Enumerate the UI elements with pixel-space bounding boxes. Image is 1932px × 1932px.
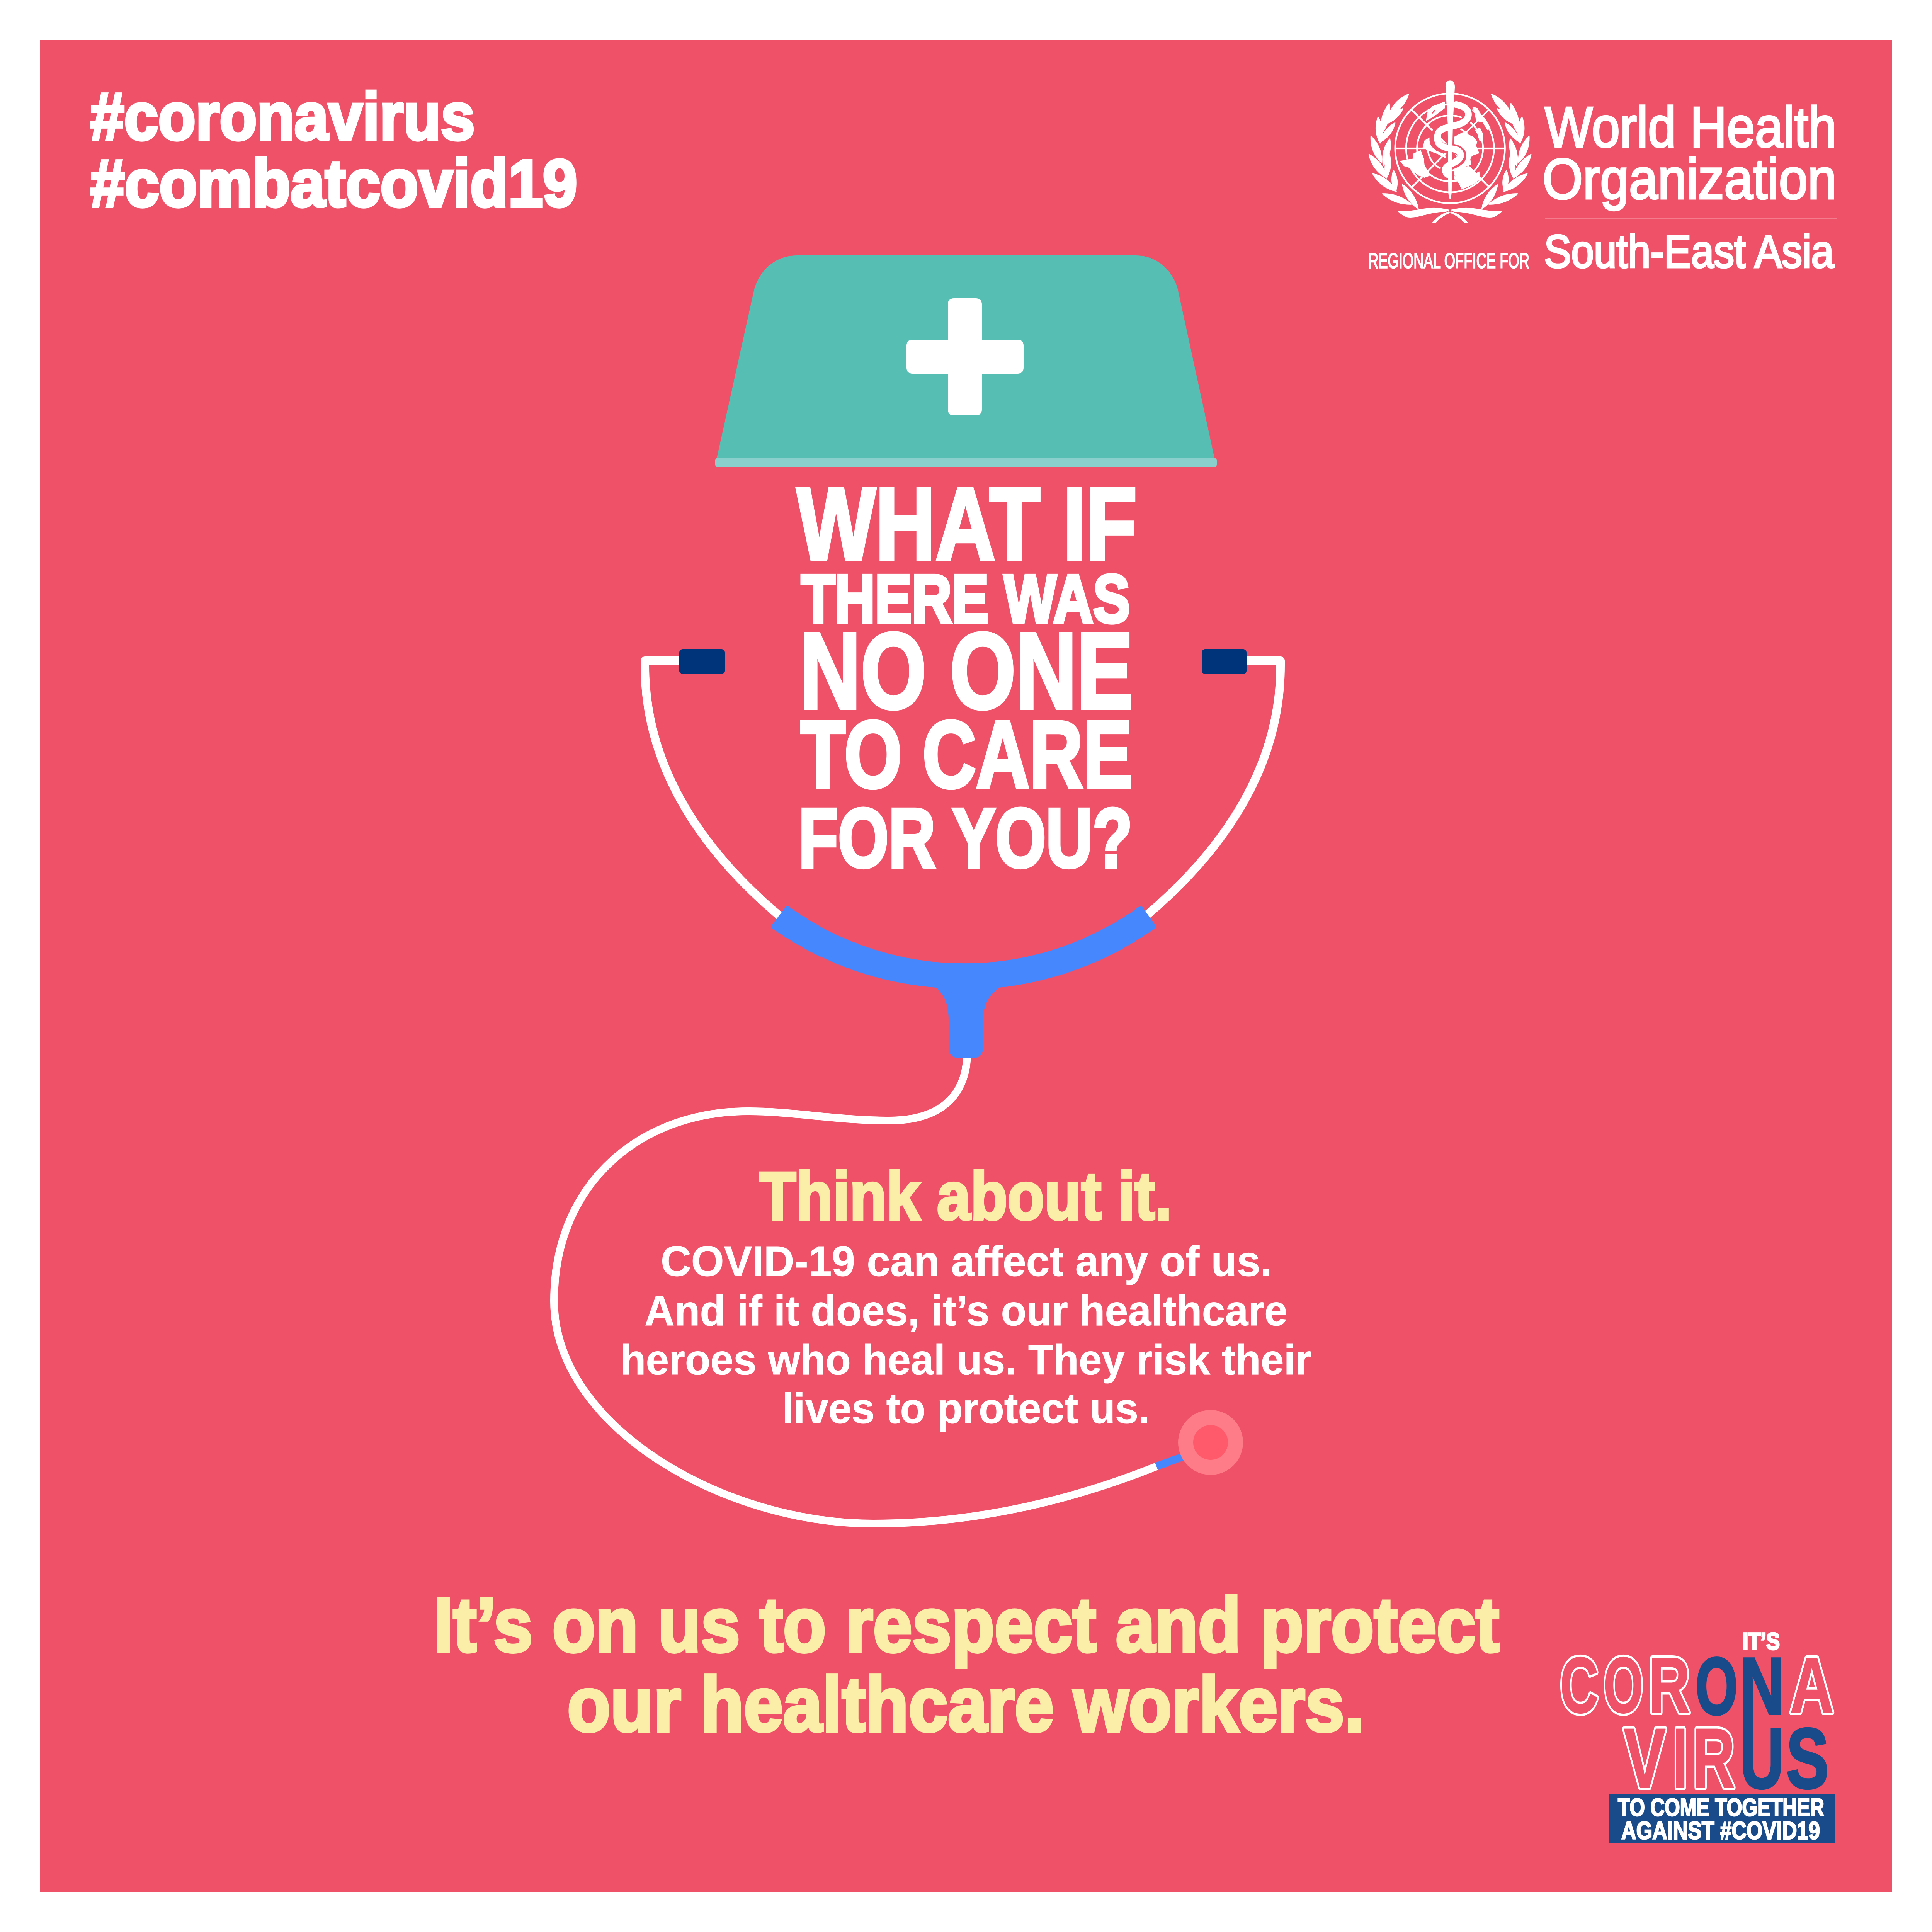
body text: COVID-19 can affect any of us. bbox=[661, 1238, 1272, 1285]
icon: stethoscope bbox=[554, 649, 1281, 1524]
slogan box bbox=[1609, 1794, 1835, 1845]
outlined letters: outer white layer: R bbox=[1648, 1641, 1690, 1730]
body text bbox=[621, 1238, 1311, 1432]
blue letters: N bbox=[1740, 1641, 1784, 1731]
title: what if there was no one to care for you: NO ONE bbox=[800, 611, 1133, 731]
outlined letters: inner coral layer: O bbox=[1604, 1641, 1643, 1730]
cap brim bbox=[715, 458, 1217, 467]
chest tube bbox=[554, 1055, 1156, 1524]
hashtags heading: #combatcovid19 bbox=[90, 146, 577, 221]
heading: think about it: Think about it. bbox=[759, 1158, 1172, 1234]
blue letters: O bbox=[1696, 1641, 1738, 1731]
logo wordmark: World Health bbox=[1545, 95, 1837, 159]
campaign logo: it's coronavirus bbox=[1560, 1628, 1835, 1845]
outlined letters: inner coral layer: A bbox=[1790, 1641, 1834, 1730]
right laurel bbox=[1482, 94, 1531, 209]
outlined letters: inner coral layer bbox=[1560, 1641, 1834, 1806]
staff halo bbox=[1446, 92, 1454, 193]
outlined letters: outer white layer: O bbox=[1604, 1641, 1643, 1730]
title: what if there was no one to care for you bbox=[797, 467, 1137, 885]
slogan box: TO COME TOGETHER bbox=[1618, 1794, 1824, 1821]
title: what if there was no one to care for you: TO CARE bbox=[801, 702, 1132, 808]
blue letters: S bbox=[1786, 1711, 1829, 1806]
outlined letters: outer white layer: V bbox=[1624, 1711, 1666, 1806]
body text: heroes who heal us. They risk their bbox=[621, 1336, 1311, 1384]
chest piece bbox=[1178, 1410, 1243, 1475]
left laurel bbox=[1369, 94, 1418, 209]
outlined letters: inner coral layer: R bbox=[1648, 1641, 1690, 1730]
left ear tip bbox=[679, 649, 725, 674]
outlined letters: inner coral layer: R bbox=[1692, 1711, 1735, 1806]
outlined letters: inner coral layer: V bbox=[1624, 1711, 1666, 1806]
globe rings and grid bbox=[1395, 94, 1505, 203]
outlined letters: outer white layer bbox=[1560, 1641, 1834, 1806]
snake head and tail bbox=[1426, 102, 1462, 190]
outlined letters: outer white layer: A bbox=[1790, 1641, 1834, 1730]
left ear tube bbox=[645, 661, 782, 918]
call to action: It’s on us to respect and protect bbox=[434, 1582, 1499, 1668]
logo wordmark: Organization bbox=[1543, 147, 1837, 211]
blue Y yoke bbox=[774, 908, 1153, 1056]
body text: lives to protect us. bbox=[782, 1385, 1150, 1432]
snake bbox=[1434, 105, 1468, 176]
outlined letters: outer white layer: C bbox=[1560, 1641, 1599, 1730]
right ear tube bbox=[1144, 661, 1281, 918]
IT'S: IT’S bbox=[1743, 1628, 1780, 1655]
hashtags heading: #coronavirus bbox=[90, 79, 475, 154]
body text: And if it does, it’s our healthcare bbox=[645, 1287, 1287, 1335]
outlined letters: inner coral layer: C bbox=[1560, 1641, 1599, 1730]
logo wordmark: South-East Asia bbox=[1544, 226, 1834, 277]
hashtags heading bbox=[90, 79, 577, 221]
title: what if there was no one to care for you: THERE WAS bbox=[801, 561, 1130, 637]
title: what if there was no one to care for you: FOR YOU? bbox=[798, 791, 1132, 885]
right ear tip bbox=[1202, 649, 1247, 674]
blue letters bbox=[1696, 1641, 1829, 1806]
logo wordmark bbox=[1368, 95, 1837, 277]
staff bbox=[1446, 80, 1455, 199]
WHO South-East Asia logo bbox=[1368, 80, 1837, 277]
cap cross bbox=[906, 298, 1024, 415]
slogan box: AGAINST #COVID19 bbox=[1621, 1817, 1820, 1845]
icon: WHO emblem bbox=[1369, 80, 1531, 223]
title: what if there was no one to care for you: WHAT IF bbox=[797, 467, 1137, 582]
outlined letters: inner coral layer: I bbox=[1673, 1711, 1688, 1806]
call to action bbox=[434, 1582, 1499, 1748]
blue tube end bbox=[1156, 1457, 1182, 1466]
outlined letters: outer white layer: R bbox=[1692, 1711, 1735, 1806]
call to action: our healthcare workers. bbox=[567, 1662, 1364, 1748]
icon: nurse cap bbox=[715, 255, 1217, 467]
continents bbox=[1400, 107, 1491, 190]
blue letters: U bbox=[1740, 1711, 1784, 1806]
ribbon bbox=[1397, 208, 1503, 223]
logo wordmark: REGIONAL OFFICE FOR bbox=[1368, 249, 1529, 273]
outlined letters: outer white layer: I bbox=[1673, 1711, 1688, 1806]
